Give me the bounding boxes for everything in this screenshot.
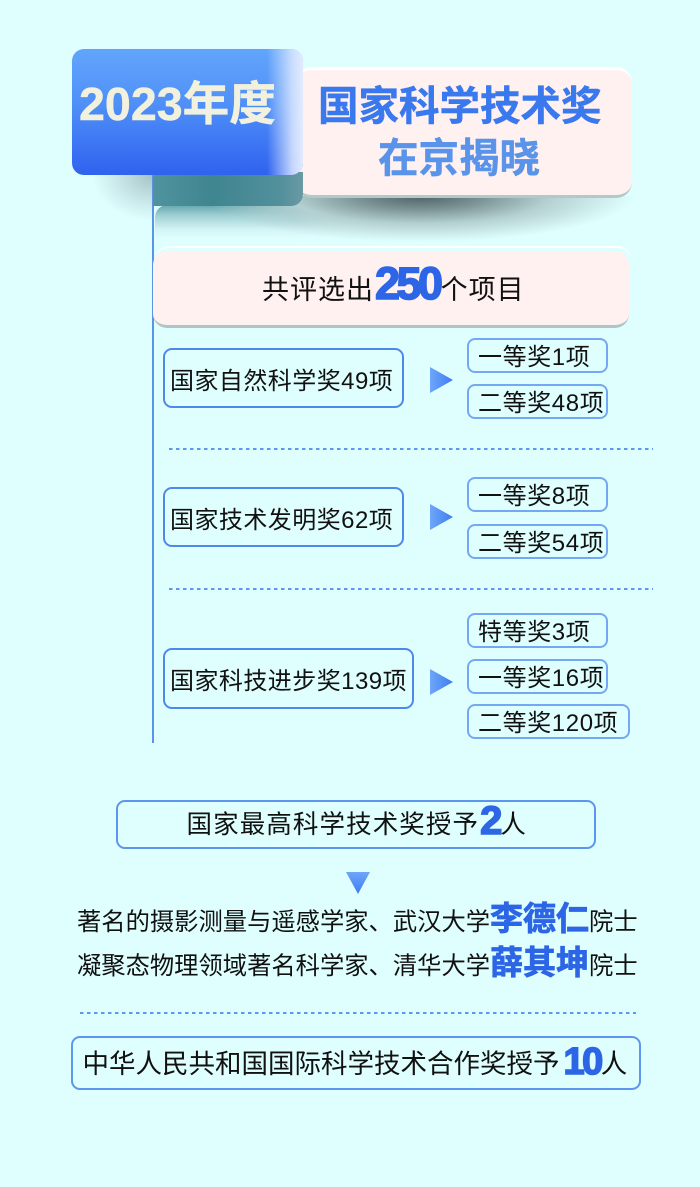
panel: title [296, 67, 632, 198]
second prize box [467, 524, 608, 559]
heading: revealed in Beijing: 在京揭晓 [378, 135, 540, 181]
second prize box: 二等奖48项 [478, 390, 604, 417]
second prize box: 二等奖120项 [478, 710, 618, 737]
special prize box [467, 613, 608, 648]
first prize box [467, 477, 608, 512]
arrow [430, 504, 453, 530]
main box invention: 国家技术发明奖62项 [170, 507, 393, 534]
box: international award: 中华人民共和国国际科学技术合作奖授予10人 [82, 1041, 627, 1083]
second prize box [467, 384, 608, 419]
main box progress [163, 648, 414, 709]
arrow: down [346, 872, 370, 894]
text: laureate 2: 凝聚态物理领域著名科学家、清华大学薛其坤院士 [77, 944, 638, 981]
box: top award: 国家最高科学技术奖授予2人 [186, 799, 527, 843]
heading: award name: 国家科学技术奖 [318, 83, 602, 129]
vertical timeline line [152, 175, 154, 743]
first prize box: 一等奖8项 [478, 483, 590, 510]
group: natural science award [163, 338, 608, 419]
group: science and technology progress award [163, 613, 630, 739]
group: technological invention award [163, 477, 608, 559]
shadow under ribbon [155, 206, 319, 232]
second prize box: 二等奖54项 [478, 530, 604, 557]
second prize box [467, 704, 630, 739]
main box progress: 国家科技进步奖139项 [170, 668, 407, 695]
arrow [430, 669, 453, 695]
panel: total projects [153, 251, 629, 328]
banner: 2023 [72, 49, 303, 175]
shadow under title panel [200, 196, 640, 246]
banner text: 2023年度 [79, 78, 276, 130]
first prize box [467, 338, 608, 373]
first prize box [467, 659, 608, 694]
box: top award [116, 800, 596, 849]
total text: 共评选出250个项目 [262, 258, 525, 309]
first prize box: 一等奖16项 [478, 665, 604, 692]
banner drop shadow [90, 175, 154, 225]
main box invention [163, 487, 404, 547]
main box natural science [163, 348, 404, 408]
arrow [430, 367, 453, 393]
text: laureate 1: 著名的摄影测量与遥感学家、武汉大学李德仁院士 [77, 900, 638, 937]
main box natural science: 国家自然科学奖49项 [170, 368, 393, 395]
ribbon fold [153, 172, 303, 206]
special prize box: 特等奖3项 [478, 619, 590, 646]
banner fold highlight [267, 49, 303, 175]
first prize box: 一等奖1项 [478, 344, 590, 371]
